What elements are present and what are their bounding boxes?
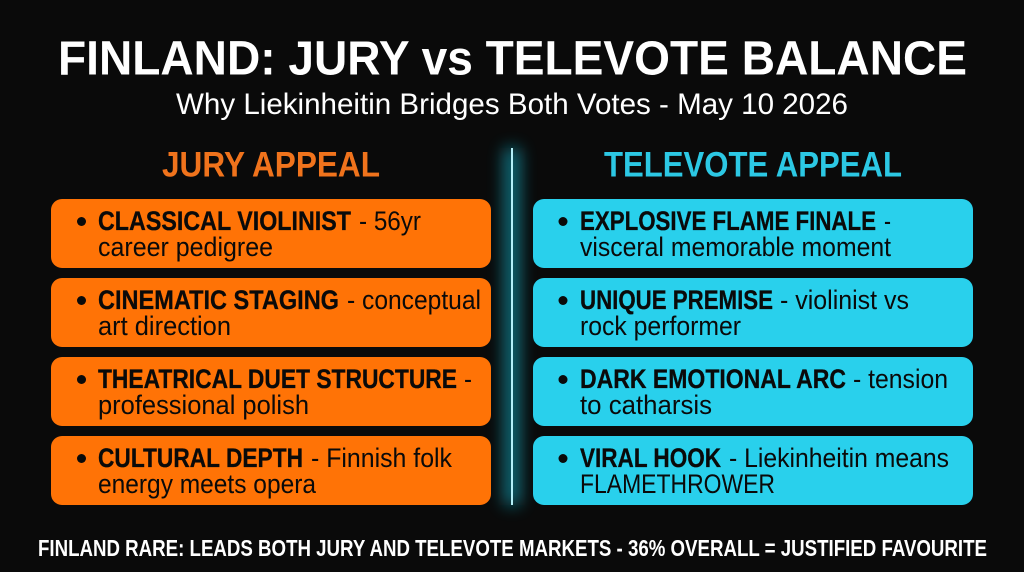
panel: televote card 1: [533, 199, 973, 268]
panel: televote card 1: EXPLOSIVE FLAME FINALE: [580, 206, 876, 236]
title: FINLAND: JURY vs TELEVOTE BALANCE: [58, 32, 967, 86]
panel: televote card 3: [533, 357, 973, 426]
panel: televote card 4: [533, 436, 973, 505]
panel: jury card 4: - Finnish folk: [311, 443, 452, 473]
panel: televote card 4: - Liekinheitin means: [729, 443, 949, 473]
panel: televote card 3: DARK EMOTIONAL ARC: [580, 364, 846, 394]
panel: televote card 2: UNIQUE PREMISE: [580, 285, 773, 315]
panel: jury card 4: CULTURAL DEPTH: [98, 443, 303, 473]
panel: jury card 1: career pedigree: [98, 232, 273, 262]
panel: televote card 3: - tension: [853, 364, 948, 394]
panel: jury card 3: [51, 357, 491, 426]
panel: jury card 2: - conceptual: [347, 285, 481, 315]
panel: televote card 4: FLAMETHROWER: [580, 469, 775, 499]
panel: televote card 2: rock performer: [580, 311, 741, 341]
panel: televote card 2: - violinist vs: [780, 285, 909, 315]
panel: televote card 1: -: [884, 206, 891, 236]
panel: jury card 1: [51, 199, 491, 268]
subtitle: Why Liekinheitin Bridges Both Votes - May 10 2026: [176, 88, 848, 121]
heading: televote appeal: TELEVOTE APPEAL: [604, 146, 902, 184]
glowing divider: [504, 148, 520, 505]
panel: televote card 2: [533, 278, 973, 347]
panel: jury card 3: professional polish: [98, 390, 309, 420]
panel: jury card 2: CINEMATIC STAGING: [98, 285, 339, 315]
panel: jury card 1: CLASSICAL VIOLINIST: [98, 206, 351, 236]
panel: jury card 3: THEATRICAL DUET STRUCTURE: [98, 364, 457, 394]
panel: televote card 3: to catharsis: [580, 390, 712, 420]
panel: televote card 4: VIRAL HOOK: [580, 443, 721, 473]
panel: jury card 2: art direction: [98, 311, 231, 341]
panel: jury card 2: [51, 278, 491, 347]
panel: jury card 4: [51, 436, 491, 505]
heading: jury appeal: JURY APPEAL: [162, 146, 380, 184]
panel: televote card 1: visceral memorable moment: [580, 232, 891, 262]
panel: jury card 1: - 56yr: [359, 206, 421, 236]
panel: jury card 3: -: [464, 364, 472, 394]
panel: jury card 4: energy meets opera: [98, 469, 317, 499]
